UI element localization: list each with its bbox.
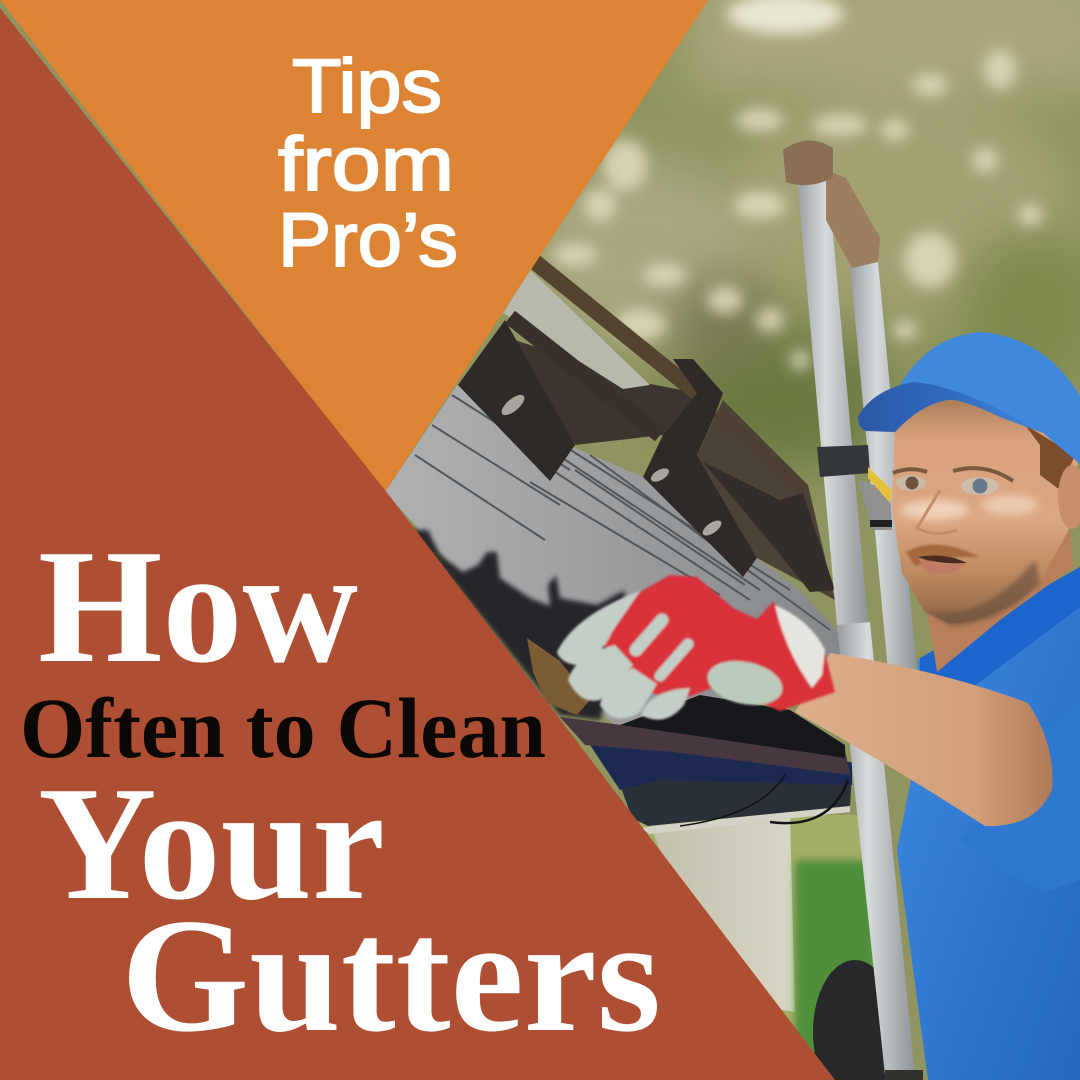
title: How Often to Clean Your Gutters bbox=[20, 517, 661, 1066]
heading: Tips from Pro's bbox=[278, 44, 458, 283]
photo: sky gap inside roof bbox=[503, 270, 650, 389]
photo: worker shirt bbox=[897, 567, 1080, 1080]
panel: orange triangle bbox=[0, 0, 708, 492]
title: How Often to Clean Your Gutters: Often to Clean bbox=[20, 680, 546, 776]
photo: worker arm bbox=[795, 653, 1052, 826]
title: How Often to Clean Your Gutters: Gutters bbox=[121, 886, 661, 1066]
photo: blue cap bbox=[858, 332, 1080, 464]
photo: ladder bbox=[783, 140, 923, 1080]
photo: gutter bbox=[560, 695, 852, 834]
photo: red glove bbox=[557, 575, 835, 720]
photo: black roof brackets bbox=[458, 262, 835, 592]
heading: Tips from Pro's: from bbox=[278, 122, 454, 207]
photo: dark backing behind roof rails bbox=[515, 340, 835, 600]
photo: roof with gutter guard bbox=[385, 385, 845, 730]
panel: rust triangle bbox=[0, 8, 835, 1080]
photo: leaves in gutter bbox=[527, 638, 590, 715]
photo: worker neck and face bbox=[892, 398, 1080, 672]
photo: wall and garden below gutter bbox=[640, 815, 897, 1080]
title: How Often to Clean Your Gutters: How bbox=[38, 517, 358, 697]
heading: Tips from Pro's: Tips bbox=[292, 44, 442, 129]
title: How Often to Clean Your Gutters: Your bbox=[38, 754, 385, 934]
heading: Tips from Pro's: Pro’s bbox=[278, 198, 458, 283]
gutter shadow under scalloped tiles bbox=[412, 530, 625, 720]
